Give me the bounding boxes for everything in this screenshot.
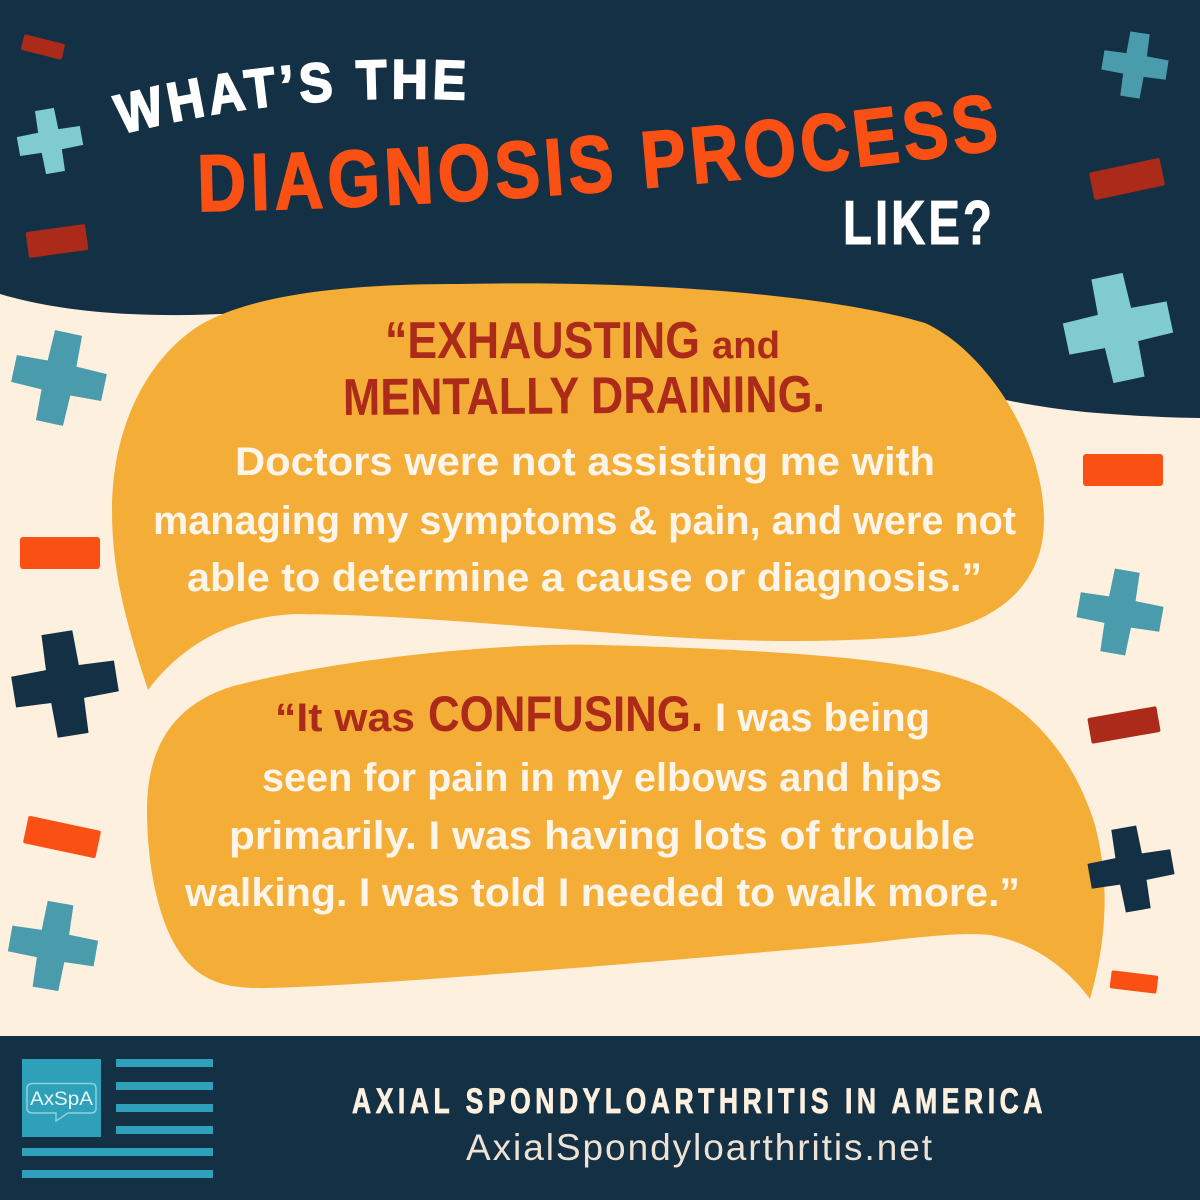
quote body: primarily. I was having lots of trouble	[229, 814, 975, 858]
flag stripes	[22, 1059, 213, 1178]
icon: plus navy overlapping second bubble	[1082, 820, 1180, 918]
icon: minus brick right	[1087, 706, 1161, 744]
bubble shape	[112, 283, 1044, 690]
plus icons	[3, 28, 1181, 996]
quote body: able to determine a cause or diagnosis.”	[187, 556, 982, 600]
icon: minus brick top right	[1089, 158, 1165, 200]
icon: plus teal left	[4, 323, 114, 433]
icon: minus brick top left	[21, 34, 65, 60]
quote body: managing my symptoms & pain, and were not	[153, 499, 1016, 543]
logo speech badge: AxSpA	[30, 1089, 93, 1110]
title line: diagnosis process: DIAGNOSIS PROCESS	[200, 95, 996, 212]
title line: what's the: WHAT’S THE	[110, 59, 465, 133]
icon: minus orange lower left	[23, 816, 101, 858]
quote body: Doctors were not assisting me with	[235, 440, 935, 484]
icon: plus navy left	[6, 625, 124, 743]
speech bubble: second quote	[147, 645, 1105, 999]
logo square	[22, 1059, 101, 1137]
quote heading line one: and	[712, 325, 780, 367]
quote body: walking. I was told I needed to walk more.”	[184, 871, 1020, 915]
icon: plus teal top right	[1098, 28, 1172, 102]
icon: plus light teal top left	[13, 104, 87, 178]
footer band	[0, 1036, 1200, 1200]
logo: flag	[22, 1059, 213, 1178]
title line: like: LIKE?	[843, 189, 995, 258]
speech bubble: first quote	[112, 283, 1044, 690]
minus icons	[20, 34, 1165, 994]
icon: plus light teal right	[1055, 265, 1181, 391]
quote opening line	[275, 686, 930, 742]
icon: minus orange left	[20, 537, 100, 569]
icon: plus teal right	[1071, 563, 1169, 661]
quote opening line: “It was	[275, 696, 415, 740]
quote heading line two: MENTALLY DRAINING.	[343, 366, 825, 427]
icon: plus teal bottom left	[3, 896, 103, 996]
footer url: AxialSpondyloarthritis.net	[466, 1127, 933, 1168]
quote opening line: I was being	[715, 696, 930, 740]
quote opening line: CONFUSING.	[428, 686, 703, 742]
logo speech badge	[27, 1084, 96, 1121]
bubble shape	[147, 645, 1105, 999]
quote body: seen for pain in my elbows and hips	[262, 756, 942, 800]
quote body	[153, 440, 1016, 600]
quote heading line one: “EXHAUSTING	[385, 312, 700, 370]
icon: minus orange bottom right	[1110, 970, 1158, 994]
title	[110, 59, 996, 258]
header navy wave	[0, 0, 1200, 418]
icon: minus orange right	[1083, 454, 1163, 486]
quote body	[184, 756, 1020, 915]
icon: minus brick left	[25, 224, 89, 258]
